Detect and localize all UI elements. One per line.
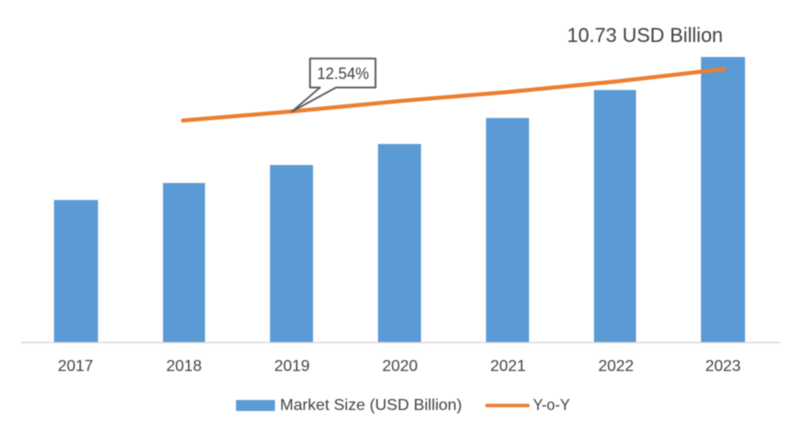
bar: 2021 [486, 118, 529, 342]
bar: 2022 [594, 90, 636, 342]
legend label: Y-o-Y: Y-o-Y [533, 397, 570, 414]
label: 2021: 2021 [490, 358, 526, 375]
label: 2018: 2018 [166, 358, 202, 375]
bars: market size by year [54, 57, 745, 342]
label: 2023: 2023 [705, 358, 741, 375]
callout: 12.54% growth: 12.54% [317, 64, 369, 83]
x axis year labels [58, 358, 741, 375]
legend swatch: Y-o-Y [487, 404, 528, 407]
label: 2020: 2020 [382, 358, 418, 375]
annotation: 2023 market value: 10.73 USD Billion [567, 25, 723, 47]
callout: 12.54% growth [292, 58, 376, 112]
bar: 2020 [378, 144, 421, 342]
bar: 2017 [54, 200, 98, 342]
x axis line [21, 342, 780, 344]
label: 2019: 2019 [274, 358, 310, 375]
legend label: market size: Market Size (USD Billion) [280, 397, 462, 414]
bar: 2019 [270, 165, 313, 342]
bar: 2023 [701, 57, 745, 342]
label: 2017: 2017 [58, 358, 93, 375]
line: Y-o-Y trend [183, 69, 724, 120]
legend swatch: market size [236, 400, 275, 411]
bar: 2018 [163, 183, 205, 342]
legend [236, 397, 570, 414]
label: 2022: 2022 [598, 358, 634, 375]
